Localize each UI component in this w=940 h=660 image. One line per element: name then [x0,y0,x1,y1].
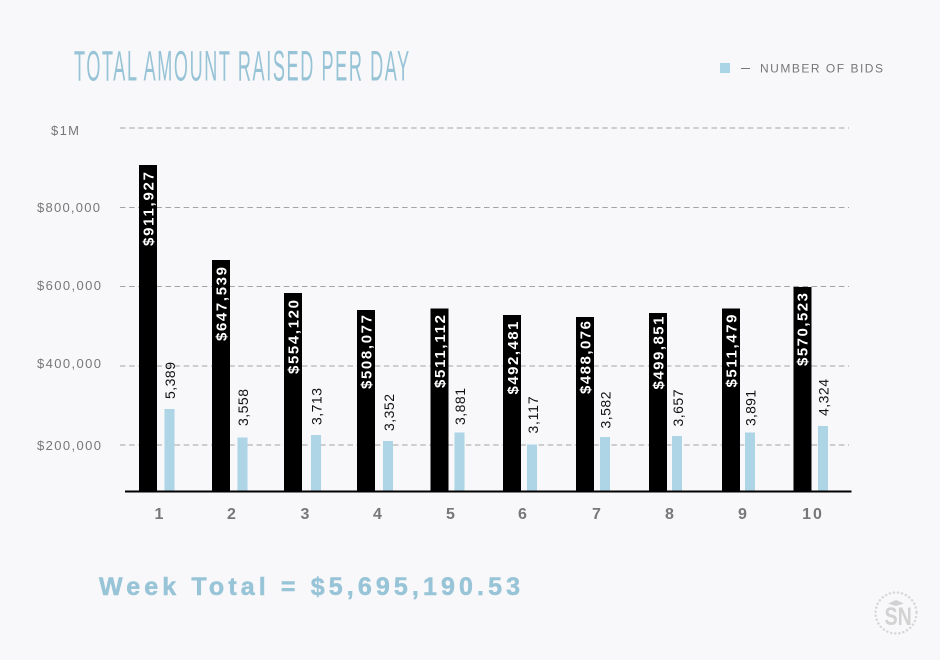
day 2 bars [212,260,251,491]
week total: Week Total = $5,695,190.53 [99,573,520,601]
bar chart: amount raised and number of bids [139,165,832,491]
day 5 bars: 3,881 [452,388,468,425]
y-axis labels: $1M [51,123,79,138]
day 1 bars: 5,389 [162,362,178,399]
x-axis day labels: 9 [738,506,747,523]
title: TOTAL AMOUNT RAISED PER DAY [74,41,409,90]
icon: logo badge: SN [884,603,912,631]
x-axis day labels [155,506,824,523]
day 3 bars: $554,120 [286,300,302,374]
x-axis day labels: 1 [155,506,164,523]
day 6 bars: 3,117 [525,396,541,434]
x-axis day labels: 5 [446,506,455,523]
y-axis labels: $200,000 [37,438,101,453]
day 7 bars: $488,076 [578,321,594,394]
day 5 bars [430,308,468,491]
day 4 bars: $508,077 [358,315,376,389]
x-axis day labels: 6 [518,506,527,523]
day 10 bars [794,287,832,491]
x-axis day labels: 3 [301,506,310,523]
day 4 bars: 3,352 [381,394,397,431]
legend: number of bids: NUMBER OF BIDS [760,62,883,76]
day 2 bars: 3,558 [235,389,251,426]
x-axis day labels: 7 [592,506,601,523]
day 8 bars: 3,657 [670,389,686,426]
y-axis labels: $800,000 [37,200,100,215]
y-axis labels [37,123,101,453]
x-axis day labels: 10 [802,506,824,523]
day 8 bars: $499,851 [650,316,668,390]
day 4 bars [357,310,397,491]
day 7 bars [576,317,614,491]
day 7 bars: 3,582 [598,391,614,428]
day 10 bars: $570,523 [794,293,812,366]
icon: logo badge [876,592,916,634]
x-axis day labels: 8 [665,506,674,523]
day 8 bars [649,313,686,491]
x-axis day labels: 4 [373,506,382,523]
day 6 bars [503,315,541,491]
day 5 bars: $511,112 [432,315,449,388]
day 6 bars: $492,481 [505,322,522,394]
day 3 bars: 3,713 [308,388,324,425]
y-axis labels: $400,000 [37,356,101,371]
day 1 bars: $911,927 [140,172,158,246]
day 9 bars: 3,891 [742,390,758,426]
day 9 bars: $511,479 [724,314,740,388]
x-axis day labels: 2 [227,506,236,523]
day 10 bars: 4,324 [816,379,832,416]
day 3 bars [284,293,324,491]
day 1 bars [139,165,178,491]
y-axis labels: $600,000 [37,278,101,293]
day 2 bars: $647,539 [214,267,230,341]
day 9 bars [722,308,758,491]
